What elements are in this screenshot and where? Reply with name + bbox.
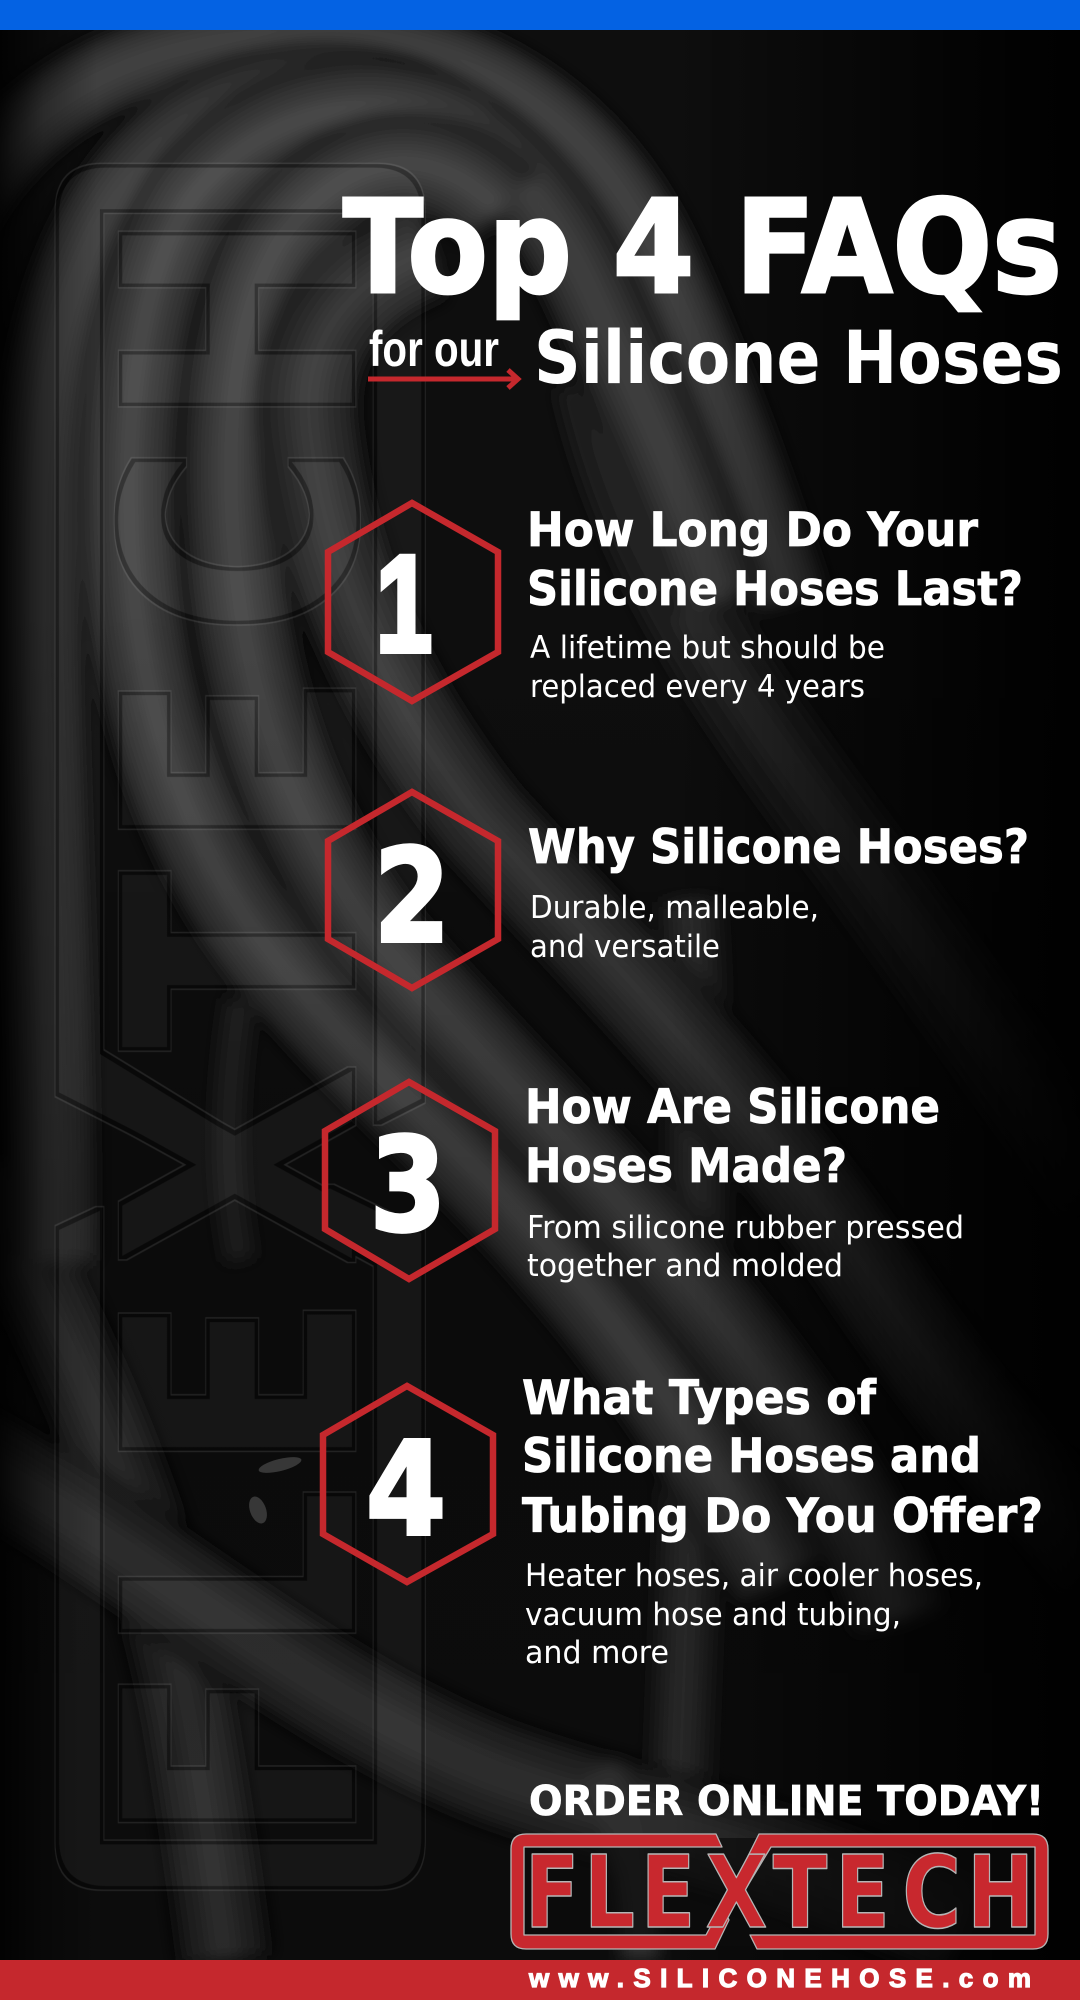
answer 2: Durable, malleable,: [530, 890, 819, 926]
bottom red bar: [0, 1960, 1080, 2000]
answer 4: [525, 1558, 983, 1671]
question 3: Hoses Made?: [525, 1139, 847, 1194]
FAQ 2: [328, 792, 1029, 988]
answer 1: A lifetime but should be: [530, 630, 885, 666]
question 1: Silicone Hoses Last?: [527, 562, 1023, 617]
number 1: 1: [376, 528, 432, 681]
watermark: rotated Flextech logo: FLEXTECH: [60, 212, 427, 1842]
question 4: What Types of: [522, 1371, 877, 1426]
question 4: Tubing Do You Offer?: [522, 1489, 1043, 1544]
arrow: [368, 370, 518, 388]
question 4: Silicone Hoses and: [522, 1429, 981, 1484]
answer 2: [530, 890, 819, 965]
Flextech logo: FLEXTECH: [525, 1835, 1034, 1951]
number 2: 2: [374, 822, 450, 972]
answer 1: replaced every 4 years: [530, 669, 865, 705]
number 4: 4: [366, 1415, 446, 1565]
subtitle: for our: for our: [369, 321, 499, 377]
answer 3: From silicone rubber pressed: [527, 1210, 964, 1246]
answer 3: [527, 1210, 964, 1284]
website url: www.SILICONEHOSE.com: [528, 1963, 1031, 1993]
hexagon badge 4: [323, 1386, 493, 1582]
FAQ 4: [323, 1371, 1043, 1671]
question 1: [527, 503, 1023, 617]
answer 2: and versatile: [530, 929, 720, 965]
answer 3: together and molded: [527, 1248, 843, 1284]
FAQ 3: [325, 1080, 964, 1284]
answer 1: [530, 630, 885, 705]
question 4: [522, 1371, 1043, 1544]
question 2: Why Silicone Hoses?: [528, 820, 1029, 875]
number 3: 3: [370, 1111, 446, 1261]
call to action: ORDER ONLINE TODAY!: [529, 1777, 1044, 1825]
top blue bar: [0, 0, 1080, 30]
title: [343, 173, 1063, 401]
answer 4: Heater hoses, air cooler hoses,: [525, 1558, 983, 1594]
FAQ 1: [328, 503, 1023, 705]
hexagon badge 1: [328, 503, 498, 701]
answer 4: and more: [525, 1635, 669, 1671]
hexagon badge 2: [328, 792, 498, 988]
question 3: [525, 1080, 940, 1194]
answer 4: vacuum hose and tubing,: [525, 1597, 901, 1633]
hexagon badge 3: [325, 1082, 495, 1279]
question 1: How Long Do Your: [527, 503, 979, 558]
question 3: How Are Silicone: [525, 1080, 940, 1135]
